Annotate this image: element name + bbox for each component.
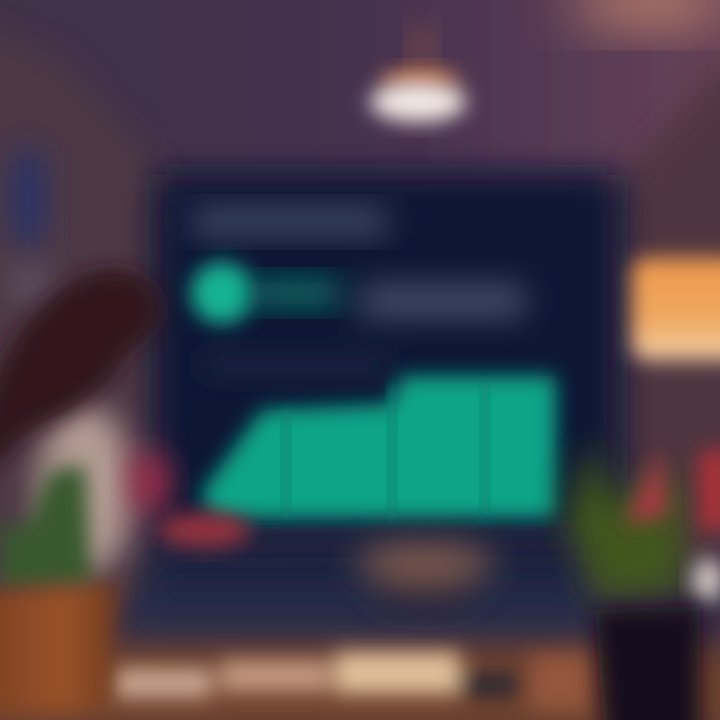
icon: potted plant on the left bbox=[0, 465, 120, 715]
icon: green circle with label bbox=[191, 262, 340, 324]
bar chart: green bars bbox=[200, 376, 556, 520]
text block placeholder on screen bbox=[200, 285, 525, 372]
icon: potted plant on the right bbox=[565, 440, 720, 720]
icon: orange wall lamp bbox=[632, 258, 720, 360]
heading placeholder on screen bbox=[192, 208, 387, 236]
panel: left wall bbox=[0, 20, 160, 600]
panel: lower dark desk bbox=[125, 535, 600, 640]
ceiling glow, top right bbox=[570, 0, 720, 24]
icon: wall picture on the left bbox=[6, 150, 54, 301]
panel: dark dashboard screen bbox=[155, 175, 617, 535]
icon: bowl on desk bbox=[355, 542, 495, 611]
figure: person with long hair bbox=[0, 269, 251, 575]
panel: right wall bbox=[630, 60, 720, 560]
background: ceiling bbox=[0, 0, 720, 180]
icon: ceiling lamp bbox=[370, 25, 466, 122]
panel: wooden table bbox=[0, 645, 720, 720]
wooden table highlights bbox=[112, 652, 590, 710]
